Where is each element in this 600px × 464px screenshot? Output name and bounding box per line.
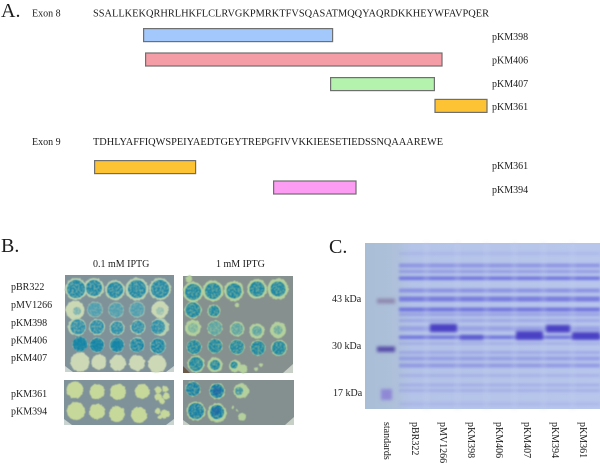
strain labels: pKM406 [11,336,47,346]
lane labels: standards [381,422,392,460]
plate: 0.1 mM IPTG upper [65,275,174,373]
lane labels: pKM361 [577,422,588,458]
overexpressed protein bands [430,324,600,340]
lane labels: pKM406 [493,422,504,458]
strain labels: pKM394 [11,406,47,418]
heading: A.: A. [1,0,20,22]
strain labels: pBR322 [11,282,44,293]
label: pKM406: pKM406 [492,56,528,66]
size marker: 17 kDa: 17 kDa [333,388,363,399]
label: Exon 8: Exon 8 [32,8,61,20]
bar: pKM398 [144,29,333,42]
lane labels: pKM394 [549,422,560,458]
strain labels [11,282,52,418]
gel image [365,243,600,409]
sequence: Exon 9: TDHLYAFFIQWSPEIYAEDTGEYTREPGFIVVKKIEESETIEDSSNQAAAREWE [93,137,443,148]
lane labels: pMV1266 [437,422,448,463]
molecular weight standards [377,298,395,400]
column heading: 1 mM IPTG: 1 mM IPTG [216,259,265,270]
lane labels: pKM398 [465,422,476,458]
label: pKM398: pKM398 [492,32,528,43]
bar: pKM394 [274,181,356,194]
bar: pKM361 exon 9 [95,161,196,174]
bar: pKM407 [331,78,434,91]
lane labels: pKM407 [521,422,532,458]
panel: C protein gel [329,236,600,463]
bar: pKM406 [146,53,442,66]
label: pKM407: pKM407 [492,79,528,90]
plate: 1 mM IPTG lower [183,380,294,425]
label: pKM361 exon 9: pKM361 [492,161,528,172]
strain labels: pKM361 [11,389,47,400]
panel: B plate assays [1,235,294,425]
panel: A exon map [1,0,528,196]
bar: pKM361 exon 8 [435,99,487,112]
background bands across lanes [399,252,600,406]
sequence: Exon 8: SSALLKEKQRHRLHKFLCLRVGKPMRKTFVSQASATMQQYAQRDKKHEYWFAVPQER [93,8,489,20]
plate: 0.1 mM IPTG lower [64,380,174,425]
label: pKM394: pKM394 [492,185,528,196]
label: Exon 9: Exon 9 [32,137,61,148]
strain labels: pMV1266 [11,300,52,311]
size marker: 43 kDa: 43 kDa [332,294,362,305]
lane labels: pBR322 [409,422,420,455]
plate: 1 mM IPTG upper [183,276,293,374]
lane gaps [425,243,574,409]
strain labels: pKM407 [11,353,47,364]
heading: B.: B. [1,235,19,257]
lane labels [381,422,588,463]
size marker: 30 kDa: 30 kDa [332,341,362,352]
strain labels: pKM398 [11,318,47,329]
column heading: 0.1 mM IPTG: 0.1 mM IPTG [93,259,149,270]
heading: C.: C. [329,236,347,258]
label: pKM361: pKM361 [492,102,528,113]
